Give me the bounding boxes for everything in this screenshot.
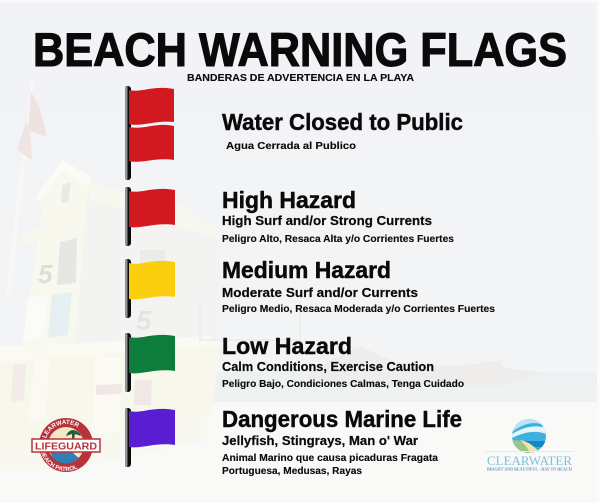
text block: low hazard: Peligro Bajo, Condiciones Calmas, Tenga Cuidado — [222, 379, 464, 390]
background: faded lifeguard tower beach photo: 5 — [136, 305, 152, 336]
tower column — [22, 160, 92, 347]
text block: dangerous marine life: Jellyfish, Stingrays, Man o' War — [222, 434, 418, 448]
text block: high hazard: High Hazard — [222, 187, 356, 213]
logo: clearwater lifeguard beach patrol: BEACH PATROL — [41, 452, 78, 472]
subtitle: BANDERAS DE ADVERTENCIA EN LA PLAYA — [187, 72, 414, 84]
flag: dangerous marine life, purple — [125, 408, 175, 467]
logo: clearwater lifeguard beach patrol: LIFEGUARD — [35, 440, 97, 452]
text block: low hazard: Low Hazard — [222, 333, 352, 359]
text block: high hazard: High Surf and/or Strong Currents — [222, 214, 432, 228]
text block: water closed to public: Agua Cerrada al Publico — [226, 141, 356, 152]
text block: dangerous marine life: Portuguesa, Medusas, Rayas — [222, 466, 362, 477]
sea horizon — [200, 372, 597, 402]
text block: medium hazard: Moderate Surf and/or Currents — [222, 286, 418, 300]
logo: clearwater bright and beautiful — [484, 419, 574, 472]
text block: low hazard — [222, 333, 464, 390]
text block: medium hazard — [222, 257, 495, 315]
flag: water closed, double red — [125, 86, 174, 180]
text block: water closed to public: Water Closed to Public — [222, 109, 463, 135]
text block: high hazard: Peligro Alto, Resaca Alta y/o Corrientes Fuertes — [222, 234, 454, 245]
tower right wing — [75, 188, 220, 345]
text block: water closed to public — [222, 109, 463, 152]
pier — [310, 347, 540, 385]
distant flag pole and flag — [5, 82, 34, 300]
tower lower rails — [0, 420, 208, 470]
flag: low hazard, green — [125, 333, 175, 392]
flag: high hazard, red — [125, 187, 175, 246]
logo: clearwater bright and beautiful: CLEARWATER — [487, 453, 572, 468]
sand — [0, 402, 597, 503]
tower platform — [0, 345, 220, 450]
text block: low hazard: Calm Conditions, Exercise Caution — [222, 360, 434, 374]
text block: dangerous marine life: Dangerous Marine Life — [222, 406, 462, 432]
text block: high hazard — [222, 187, 454, 245]
logo: clearwater lifeguard beach patrol: CLEARWATER — [42, 420, 79, 438]
flag: medium hazard, yellow — [125, 259, 175, 318]
text block: medium hazard: Medium Hazard — [222, 257, 391, 283]
text block: dangerous marine life — [222, 406, 462, 477]
logo: clearwater lifeguard beach patrol — [31, 418, 101, 472]
text block: medium hazard: Peligro Medio, Resaca Moderada y/o Corrientes Fuertes — [222, 304, 495, 315]
text block: dangerous marine life: Animal Marino que causa picaduras Fragata — [222, 453, 438, 464]
title: BEACH WARNING FLAGS — [33, 23, 567, 76]
logo: clearwater bright and beautiful: BRIGHT AND BEAUTIFUL · BAY TO BEACH — [487, 466, 573, 472]
tower number 5: 5 — [38, 259, 53, 289]
